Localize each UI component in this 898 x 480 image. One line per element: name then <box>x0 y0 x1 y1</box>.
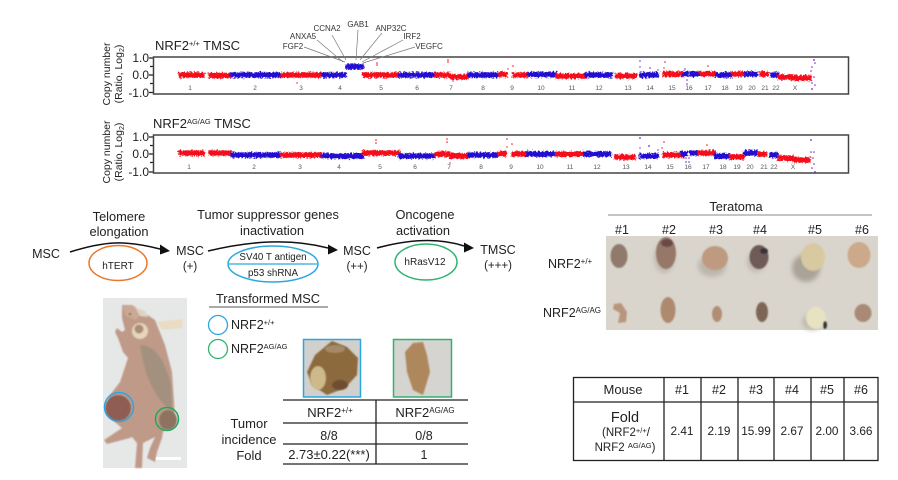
chromosome labels: 13 <box>622 164 630 171</box>
fold row label: AG/AG <box>628 441 652 450</box>
step label: oncogene activation: Oncogene <box>395 207 455 222</box>
table values: 2.73±0.22(***) <box>288 447 370 462</box>
SV40 T antigen / p53 shRNA ellipse: p53 shRNA <box>248 268 299 279</box>
teratoma row labels: NRF2 <box>543 306 576 320</box>
chromosome labels: 8 <box>479 164 483 171</box>
chromosome labels: 18 <box>721 85 729 92</box>
table values: 1 <box>421 448 428 462</box>
copy number segments <box>179 151 810 162</box>
outlier points <box>296 56 816 90</box>
fold change table <box>573 377 878 460</box>
gene callouts <box>283 20 443 63</box>
chart title: NRF2 <box>155 38 189 53</box>
copy number chart: NRF2 AG/AG TMSC <box>101 116 848 184</box>
gene callouts: GAB1 <box>347 20 369 29</box>
legend: NRF2 AG/AG <box>208 340 288 358</box>
teratoma row labels: NRF2 <box>548 257 581 271</box>
chromosome labels: 20 <box>746 164 754 171</box>
chromosome labels: 21 <box>760 164 768 171</box>
gene callouts: IRF2 <box>403 32 421 41</box>
arrow: MSC to MSC (+) <box>70 243 170 254</box>
column headers: +/+ <box>341 406 353 415</box>
y axis title: Copy number <box>101 42 113 106</box>
step label: telomere elongation: elongation <box>89 224 149 239</box>
y axis labels: 0.0 <box>132 68 149 82</box>
teratoma sample numbers: #2 <box>662 223 676 237</box>
chromosome labels: X <box>791 164 796 171</box>
gene callouts: VEGFC <box>415 42 443 51</box>
y axis title, second line: (Ratio, Log <box>113 130 125 181</box>
transformed MSC legend <box>208 291 328 358</box>
MSC (++) label <box>343 244 371 273</box>
plot frame <box>154 135 848 173</box>
chromosome labels: 6 <box>413 164 417 171</box>
chromosome labels: 11 <box>567 164 574 171</box>
gene callouts: CCNA2 <box>313 24 341 33</box>
chromosome labels: 8 <box>481 85 485 92</box>
chromosome labels: 2 <box>252 164 256 171</box>
tumor marker: blue circle <box>104 392 134 422</box>
header row: #5 <box>820 383 834 397</box>
teratoma row labels: AG/AG <box>576 306 601 315</box>
fold values: 15.99 <box>741 424 771 438</box>
chromosome labels: 11 <box>569 85 576 92</box>
chromosome labels: 4 <box>337 164 341 171</box>
y axis title: Copy number <box>101 120 113 184</box>
column headers: NRF2 <box>395 405 429 420</box>
chromosome labels: 21 <box>761 85 769 92</box>
step label: tumor suppressor genes inactivation <box>197 207 339 238</box>
fold values: 2.00 <box>816 424 839 438</box>
chromosome labels: 7 <box>447 164 451 171</box>
teratoma heading: Teratoma <box>709 199 764 214</box>
tumor marker: green circle <box>156 408 178 430</box>
legend: NRF2 +/+: NRF2 <box>231 318 264 332</box>
hRasV12 ellipse: hRasV12 <box>404 257 446 268</box>
column headers: AG/AG <box>429 406 455 415</box>
mouse photograph <box>103 298 187 468</box>
TMSC (+++) label <box>480 243 516 272</box>
fold values: 2.67 <box>781 424 803 438</box>
arrow: MSC (++) to TMSC <box>377 241 474 252</box>
chromosome labels: 15 <box>666 164 674 171</box>
teratoma row labels: +/+ <box>581 257 593 266</box>
chromosome labels <box>187 164 796 171</box>
row labels: incidence <box>222 432 276 447</box>
y axis labels <box>128 130 153 179</box>
hRasV12 ellipse <box>395 244 457 280</box>
fold row label: +/+ <box>636 426 647 435</box>
y axis labels: 0.0 <box>132 147 149 161</box>
MSC (+) label: (+) <box>183 261 197 273</box>
chromosome labels: 15 <box>668 85 676 92</box>
gene callouts: ANP32C <box>375 24 407 33</box>
arrow: MSC (+) to MSC (++) <box>208 242 338 254</box>
fold row label: (NRF2 <box>602 427 636 439</box>
gene callouts: ANXA5 <box>290 32 317 41</box>
y axis title, second line: 2 <box>119 48 126 52</box>
MSC (++) label: MSC <box>343 244 371 258</box>
teratoma sample numbers: #1 <box>615 223 629 237</box>
fold row label <box>595 410 656 454</box>
teratoma photograph <box>606 236 878 330</box>
fold row label: NRF2 <box>595 442 625 454</box>
chromosome labels: 12 <box>595 85 603 92</box>
y axis title, second line: (Ratio, Log <box>113 52 125 103</box>
chromosome labels: 9 <box>509 164 513 171</box>
TMSC (+++) label: (+++) <box>484 260 512 272</box>
chromosome labels: 16 <box>685 85 693 92</box>
teratoma sample numbers <box>615 223 869 237</box>
header row: #1 <box>675 383 689 397</box>
scale bar <box>156 457 181 460</box>
tumor photo: NRF2 AG/AG <box>394 340 452 397</box>
legend: NRF2 AG/AG: AG/AG <box>264 342 288 351</box>
header row <box>603 382 868 397</box>
chart title: TMSC <box>200 38 240 53</box>
chromosome labels <box>188 85 798 92</box>
hTERT ellipse: hTERT <box>102 261 134 272</box>
copy number segments <box>179 64 811 80</box>
chromosome labels: 5 <box>379 85 383 92</box>
chromosome labels: 10 <box>536 164 544 171</box>
legend: NRF2 +/+ <box>208 316 275 334</box>
row labels <box>222 416 276 463</box>
chromosome labels: 13 <box>624 85 632 92</box>
teratoma row labels <box>543 257 601 320</box>
tumor incidence table <box>222 400 468 464</box>
step label: oncogene activation <box>395 207 455 238</box>
teratoma sample numbers: #4 <box>753 223 767 237</box>
chromosome labels: 19 <box>733 164 741 171</box>
chromosome labels: 22 <box>772 85 780 92</box>
MSC start label: MSC <box>32 247 60 261</box>
copy number chart: NRF2 +/+ TMSC <box>101 20 848 106</box>
gene callouts: FGF2 <box>283 42 304 51</box>
chromosome labels: 5 <box>378 164 382 171</box>
fold row label: Fold <box>611 410 639 426</box>
y axis labels: 1.0 <box>132 130 149 144</box>
chart title: +/+ <box>189 39 200 48</box>
chromosome labels: 2 <box>253 85 257 92</box>
chromosome labels: 12 <box>593 164 601 171</box>
header row: Mouse <box>603 382 643 397</box>
plot frame <box>154 57 848 94</box>
y axis title, second line: ) <box>113 45 125 48</box>
teratoma panel <box>543 199 878 330</box>
y axis title, second line: 2 <box>119 126 126 130</box>
fold values <box>671 424 873 438</box>
chart title: AG/AG <box>187 117 211 126</box>
y axis labels: -1.0 <box>128 86 149 100</box>
chromosome labels: X <box>793 85 798 92</box>
chromosome labels: 22 <box>770 164 778 171</box>
TMSC (+++) label: TMSC <box>480 243 516 257</box>
chromosome labels: 3 <box>298 164 302 171</box>
teratoma sample numbers: #6 <box>855 223 869 237</box>
teratoma sample numbers: #3 <box>709 223 723 237</box>
fold row label: ) <box>652 442 656 454</box>
chromosome labels: 9 <box>510 85 514 92</box>
y axis labels: -1.0 <box>128 165 149 179</box>
step label: telomere elongation: Telomere <box>93 209 145 224</box>
header row: #3 <box>749 383 763 397</box>
table values <box>288 429 433 462</box>
fold values: 3.66 <box>850 424 873 438</box>
y axis labels <box>128 51 153 100</box>
SV40 T antigen / p53 shRNA ellipse <box>228 246 318 282</box>
row labels: Fold <box>236 448 262 463</box>
fold row label: / <box>647 427 651 439</box>
MSC (++) label: (++) <box>346 261 368 273</box>
step label: telomere elongation <box>89 209 149 239</box>
column headers <box>307 405 455 420</box>
mouse drawing <box>104 305 183 468</box>
chromosome labels: 18 <box>719 164 727 171</box>
MSC (+) label <box>176 244 204 273</box>
chromosome labels: 14 <box>644 164 652 171</box>
chromosome labels: 20 <box>748 85 756 92</box>
step label: tumor suppressor genes inactivation: Tumor suppressor genes <box>197 207 339 222</box>
fold values: 2.19 <box>708 424 730 438</box>
chart title: NRF2 <box>153 116 187 131</box>
legend: NRF2 AG/AG: NRF2 <box>231 342 264 356</box>
chromosome labels: 6 <box>415 85 419 92</box>
legend heading: Transformed MSC <box>216 291 320 306</box>
y axis labels: 1.0 <box>132 51 149 65</box>
chart title: TMSC <box>211 116 251 131</box>
header row: #4 <box>785 383 799 397</box>
legend: NRF2 +/+: +/+ <box>264 318 275 327</box>
fold values: 2.41 <box>671 424 693 438</box>
step label: oncogene activation: activation <box>396 223 450 238</box>
table values: 0/8 <box>415 429 433 443</box>
chromosome labels: 1 <box>188 85 192 92</box>
transformation pathway <box>32 207 516 282</box>
chromosome labels: 10 <box>537 85 545 92</box>
step label: tumor suppressor genes inactivation: inactivation <box>240 223 304 238</box>
hTERT ellipse <box>89 246 147 280</box>
chromosome labels: 17 <box>702 164 710 171</box>
outlier points <box>375 137 816 173</box>
chromosome labels: 14 <box>646 85 654 92</box>
header row: #6 <box>854 383 868 397</box>
teratoma sample numbers: #5 <box>808 223 822 237</box>
chromosome labels: 17 <box>704 85 712 92</box>
chromosome labels: 1 <box>187 164 191 171</box>
chromosome labels: 3 <box>299 85 303 92</box>
chromosome labels: 16 <box>684 164 692 171</box>
column headers: NRF2 <box>307 405 341 420</box>
y axis title, second line: ) <box>113 123 125 126</box>
header row: #2 <box>712 383 726 397</box>
MSC (+) label: MSC <box>176 244 204 258</box>
tumor photo: NRF2 +/+ <box>304 340 360 397</box>
row labels: Tumor <box>230 416 268 431</box>
SV40 T antigen / p53 shRNA ellipse: SV40 T antigen <box>239 252 307 263</box>
table values: 8/8 <box>320 429 338 443</box>
chromosome labels: 7 <box>449 85 453 92</box>
chromosome labels: 19 <box>735 85 743 92</box>
chromosome labels: 4 <box>338 85 342 92</box>
